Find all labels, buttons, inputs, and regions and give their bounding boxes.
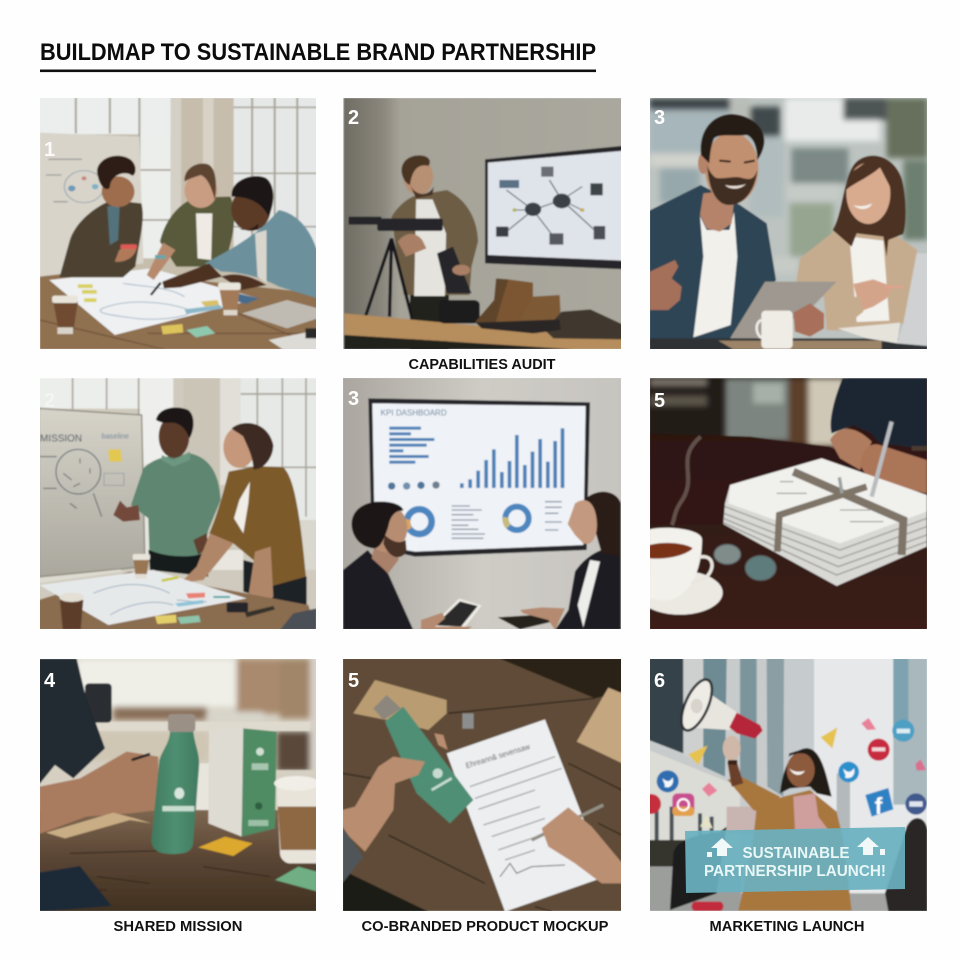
confetti and stars [688, 745, 708, 765]
panel: step 3 two partners talking [649, 98, 928, 350]
pen [532, 805, 603, 840]
man [649, 185, 776, 343]
paper stack [723, 458, 927, 586]
panel: step 8 co-branded mockup [342, 658, 622, 912]
cardboard box [353, 680, 447, 730]
person and arm [39, 659, 105, 785]
left hand [342, 757, 425, 852]
panel: step 1 team mapping around a table [40, 98, 319, 350]
woman [796, 229, 917, 331]
panel: step 5 KPI dashboard [342, 377, 622, 631]
woman [555, 540, 621, 630]
scene: woman with megaphone in city street: f [875, 793, 883, 819]
product box [208, 728, 243, 837]
saucer [637, 571, 723, 615]
panel: step 7 shared mission [39, 659, 319, 912]
caption: capabilities audit: CAPABILITIES AUDIT [408, 357, 556, 373]
table [649, 338, 928, 350]
bottle [152, 732, 199, 854]
coffee cup [277, 787, 317, 863]
camera on table [439, 300, 480, 323]
man [410, 293, 449, 350]
table [40, 270, 318, 349]
scene: green bottle and box on table [39, 659, 319, 912]
right hand [542, 807, 622, 883]
papers and laptop [837, 323, 900, 343]
phone and tablet [227, 602, 248, 612]
launch banner [685, 827, 905, 893]
banner text: SUSTAINABLE [742, 845, 850, 862]
table [39, 572, 316, 630]
step number 6: 6 [654, 670, 665, 692]
scene: bottle and signed sheet on rustic table [342, 658, 622, 912]
woman brown jacket [243, 560, 307, 605]
panel: step 2 capabilities audit [344, 98, 626, 350]
woman centre [160, 197, 234, 267]
caption: marketing launch: MARKETING LAUNCH [710, 919, 864, 935]
step number 2 (second row): 2 [44, 390, 55, 412]
buildings [649, 658, 814, 911]
woman [738, 790, 852, 911]
panel: step 6 signed documents [637, 378, 928, 630]
scene: two people at a whiteboard [39, 378, 317, 630]
clip [462, 713, 474, 729]
man in green [148, 550, 208, 577]
wall screen [485, 146, 624, 269]
camera on tripod [365, 238, 412, 318]
panel: step 4 whiteboard session [39, 378, 317, 630]
coffee cups [53, 302, 78, 328]
man right [205, 210, 318, 298]
panel: step 9 marketing launch [641, 658, 927, 911]
woman left [59, 200, 143, 277]
sheet [447, 719, 606, 912]
stickies [155, 615, 177, 624]
map paper [49, 268, 258, 335]
step number 4: 4 [44, 670, 56, 692]
step number 5: 5 [654, 390, 665, 412]
table [344, 313, 624, 349]
caption: co-branded product mockup: CO-BRANDED PRODUCT MOCKUP [362, 919, 609, 935]
dashboard screen [368, 398, 590, 557]
dashboard title: KPI DASHBOARD [381, 408, 447, 418]
crowd [670, 827, 727, 910]
cups [60, 600, 83, 629]
mug [761, 311, 793, 349]
hand under tablet [793, 303, 824, 337]
scene: two people at a whiteboard: MISSION [40, 434, 82, 445]
step number 3: 3 [654, 107, 665, 129]
step number 3 (second row): 3 [348, 388, 359, 410]
tablet [730, 282, 837, 341]
scene: KPI dashboard review [342, 377, 622, 631]
megaphone [687, 683, 738, 730]
sticky notes [198, 837, 253, 856]
step number 5 (third row): 5 [348, 670, 359, 692]
laptop [242, 300, 318, 328]
tea cup [649, 528, 702, 601]
sticky notes [161, 324, 183, 334]
boots [476, 278, 508, 328]
launch banner: PARTNERSHIP LAUNCH! [704, 863, 886, 880]
scene: paper stack and tea on dark table [637, 378, 928, 630]
scene: two people at a whiteboard: baseline [102, 431, 129, 440]
man [343, 550, 413, 630]
notebook [46, 813, 152, 838]
steam [672, 437, 701, 525]
table [39, 810, 317, 912]
step number 1: 1 [44, 139, 55, 161]
bottle [385, 707, 473, 823]
person in dark sleeve [831, 378, 927, 450]
map paper [39, 570, 247, 625]
scene: man with tripod and boots [344, 98, 626, 350]
scene: office with three colleagues [40, 98, 319, 350]
social icons [657, 770, 679, 792]
scene: man and woman with tablet [649, 98, 928, 350]
pen [872, 422, 892, 497]
scene: bottle and signed sheet on rustic table: Ehreann& sevensaw [465, 742, 531, 770]
caption: shared mission: SHARED MISSION [114, 919, 242, 935]
tablets [432, 599, 482, 629]
glasses [714, 544, 741, 564]
scene: woman with megaphone in city street [641, 658, 927, 911]
step number 2: 2 [348, 107, 359, 129]
tan note [577, 688, 622, 763]
title: BUILDMAP TO SUSTAINABLE BRAND PARTNERSHIP [40, 39, 596, 66]
